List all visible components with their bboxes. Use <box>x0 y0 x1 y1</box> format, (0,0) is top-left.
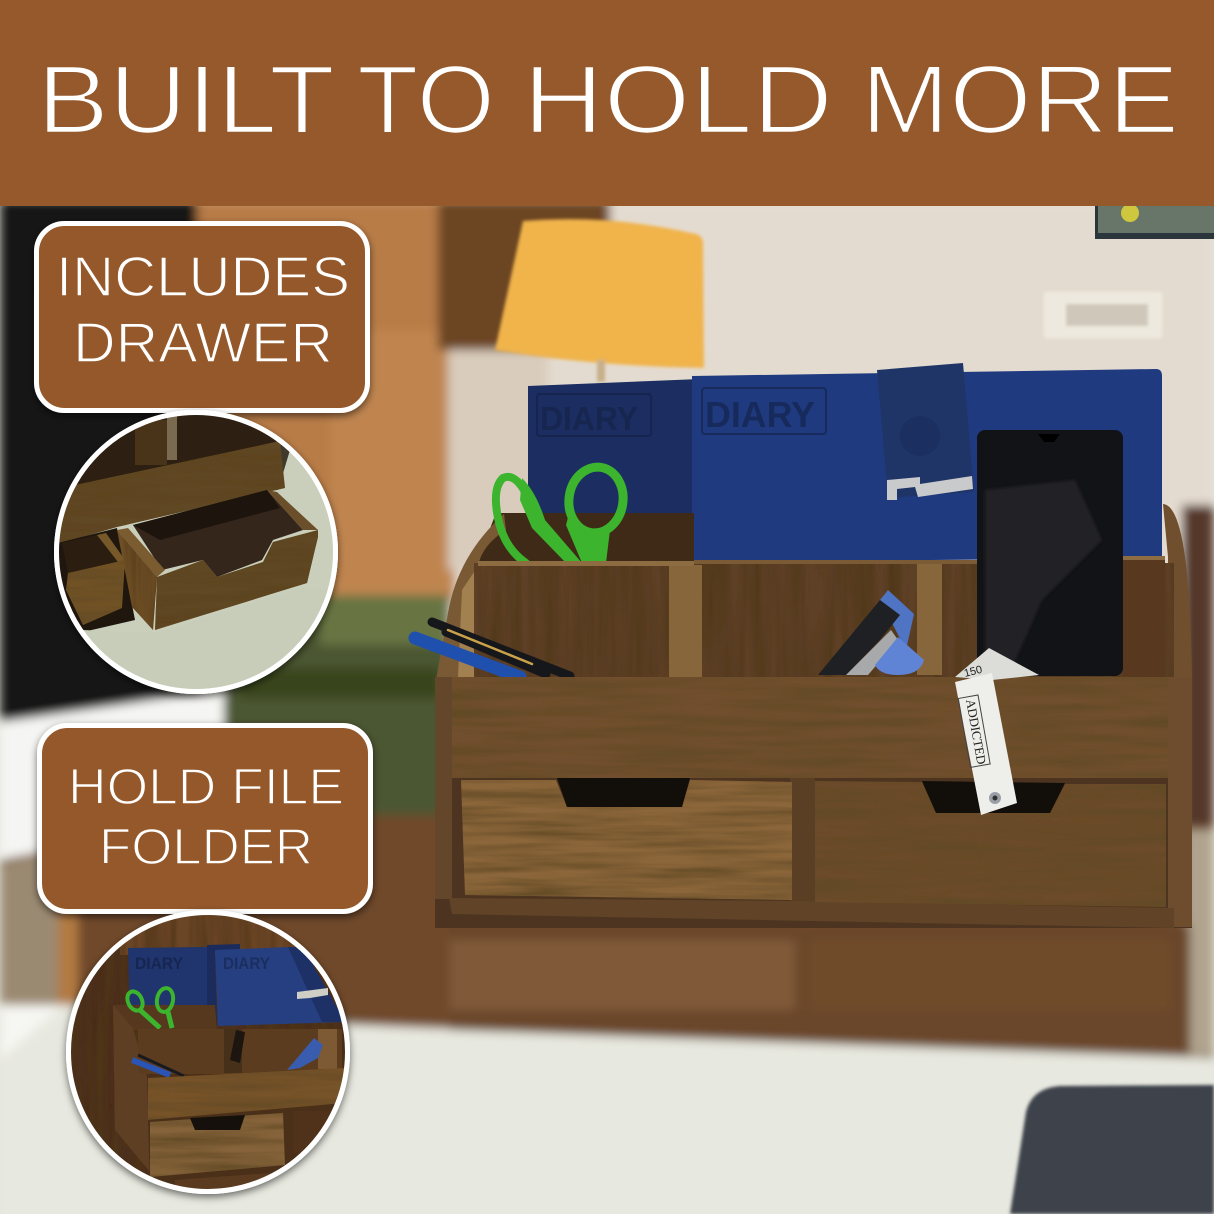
title <box>37 45 1179 154</box>
product tag <box>955 648 1039 815</box>
title: BUILT <box>37 45 335 154</box>
title: HOLD <box>523 45 833 154</box>
inset ring <box>68 912 348 1192</box>
middle compartments <box>474 556 1174 679</box>
product tag: 150 <box>963 664 984 680</box>
folder label text: HOLD FILE <box>68 758 344 815</box>
title banner <box>0 0 1214 206</box>
callout: includes drawer <box>36 224 368 410</box>
inset photo: organizer with folders: DIARY <box>223 954 271 973</box>
blue diaries <box>528 363 1162 562</box>
folder label text <box>68 758 344 875</box>
icon: green scissors <box>496 464 627 563</box>
pens <box>415 622 570 677</box>
front wooden panel and drawers <box>435 677 1192 928</box>
inset photo: organizer with folders <box>60 905 360 1200</box>
wall picture <box>1095 204 1214 239</box>
callout: hold file folder <box>40 726 370 912</box>
folder label text: FOLDER <box>99 818 313 875</box>
lamp <box>495 219 704 382</box>
mouse pad <box>1010 1085 1214 1214</box>
back wooden compartment <box>436 504 1192 680</box>
blue diaries: DIARY <box>705 394 815 435</box>
folder label box <box>40 726 370 912</box>
inset photo: organizer with folders: DIARY <box>135 954 184 973</box>
title: MORE <box>861 45 1179 154</box>
title: TO <box>357 45 495 154</box>
right drawer <box>815 781 1166 907</box>
diary strap and clasp <box>877 363 974 500</box>
drawer label text <box>56 245 350 375</box>
stapler <box>818 590 924 675</box>
left drawer <box>461 778 792 900</box>
inset ring <box>56 412 336 692</box>
blue diaries: DIARY <box>540 400 638 437</box>
wall switch <box>1044 292 1162 338</box>
inset photo: open drawer <box>50 410 350 695</box>
product tag: ADDICTED <box>963 698 989 766</box>
drawer label text: DRAWER <box>73 311 333 375</box>
drawer label text: INCLUDES <box>56 245 350 309</box>
drawer label box <box>36 224 368 410</box>
wooden desk organizer <box>415 363 1192 928</box>
black smartphone <box>977 430 1123 676</box>
